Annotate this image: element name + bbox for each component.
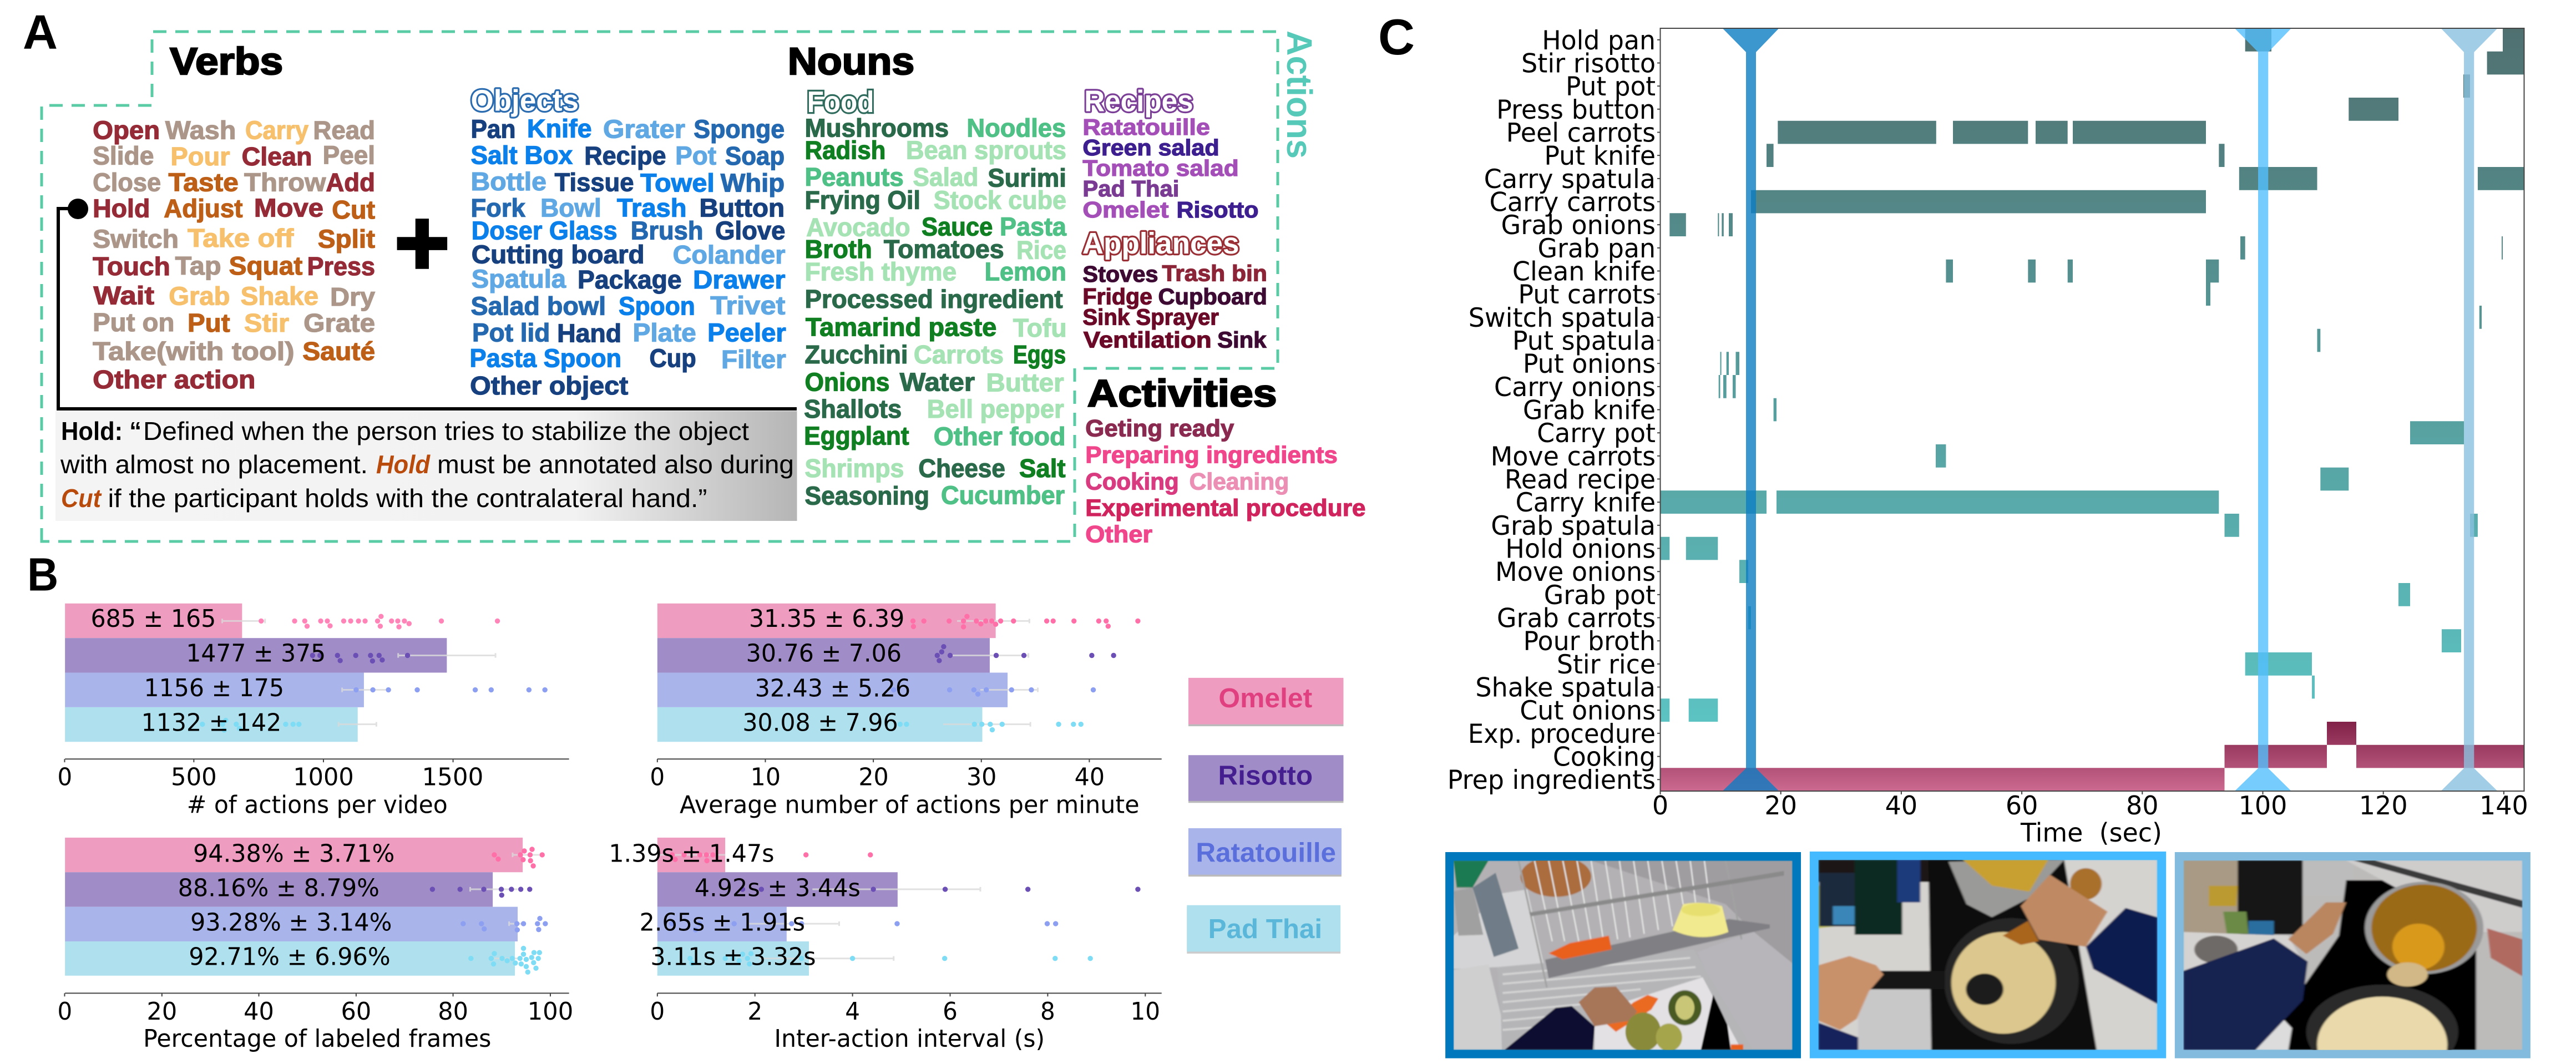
timeline y-axis labels: Grab knife	[1523, 395, 1656, 425]
object words: Hand	[557, 319, 621, 348]
food words: Shallots	[804, 395, 902, 423]
chart: percentage of labeled frames: Percentage of labeled frames	[143, 1025, 491, 1053]
object words: Plate	[633, 318, 696, 347]
object words: Pasta Spoon	[470, 343, 621, 372]
chart: percentage of labeled frames: 94.38% ± 3.71%	[193, 839, 394, 868]
time axis labels	[1652, 791, 2528, 820]
activity words	[1085, 415, 1365, 548]
legend: pad thai: Pad Thai	[1208, 914, 1322, 944]
recipe words: Pad Thai	[1082, 176, 1179, 202]
food words: Radish	[805, 136, 885, 165]
actions vertical label: Actions	[1279, 31, 1319, 159]
appliance words: Fridge	[1082, 285, 1152, 310]
activity words: Geting ready	[1085, 415, 1234, 442]
chart: actions per video: 1000	[293, 763, 354, 792]
food words: Tomatoes	[884, 235, 1004, 264]
time axis labels: 0	[1652, 791, 1668, 820]
timeline y-axis labels: Press button	[1496, 94, 1656, 125]
left charts column	[27, 548, 573, 1053]
timeline y-axis labels: Prep ingredients	[1448, 764, 1656, 796]
timeline y-axis labels: Cooking	[1553, 742, 1656, 772]
timeline y-axis labels: Grab spatula	[1491, 510, 1656, 541]
timeline y-axis labels: Move carrots	[1491, 441, 1656, 472]
chart: percentage of labeled frames: 40	[244, 997, 274, 1026]
food words: Eggplant	[804, 422, 909, 450]
activity words: Cooking	[1085, 468, 1179, 495]
recipe words: Omelet	[1082, 197, 1168, 222]
chart: percentage of labeled frames: 92.71% ± 6.96%	[189, 943, 391, 971]
object words: Recipe	[584, 141, 666, 170]
food words: Carrots	[914, 341, 1004, 369]
hold definition text: Defined when the person tries to stabilize the object	[143, 417, 749, 445]
chart: actions per minute: Average number of actions per minute	[680, 791, 1140, 819]
timeline y-axis labels: Clean knife	[1512, 256, 1656, 287]
chart: actions per minute: 10	[751, 763, 781, 792]
object words: Spoon	[619, 292, 695, 321]
appliance words: Sink	[1217, 327, 1267, 353]
timeline y-axis labels: Put spatula	[1512, 326, 1656, 356]
verb words: Touch	[93, 252, 170, 281]
chart: percentage of labeled frames: 100	[528, 997, 573, 1026]
object words: Grater	[603, 115, 685, 144]
chart: actions per minute	[650, 604, 1162, 819]
food words: Tofu	[1013, 314, 1067, 342]
timeline y-axis labels: Carry carrots	[1490, 187, 1656, 217]
appliance words: Ventilation	[1084, 327, 1212, 353]
verb words: Squat	[229, 251, 302, 280]
chart: inter-action interval: 2	[747, 997, 762, 1026]
timeline y-axis labels	[1448, 25, 1656, 796]
chart: percentage of labeled frames: 80	[438, 997, 468, 1026]
timeline y-axis labels: Grab onions	[1501, 210, 1656, 241]
time axis labels: 40	[1885, 791, 1917, 820]
chart: inter-action interval	[609, 838, 1162, 1053]
food words: Stock cube	[934, 186, 1066, 215]
object words: Bottle	[470, 167, 546, 196]
objects section	[470, 40, 914, 400]
timeline y-axis labels: Put pot	[1566, 71, 1656, 102]
timeline frame and ticks	[1657, 28, 2524, 794]
verb words: Sauté	[302, 337, 375, 366]
chart: actions per minute: 30.76 ± 7.06	[746, 639, 902, 667]
timeline y-axis labels: Stir risotto	[1521, 48, 1656, 79]
hold definition text: must be annotated also during	[437, 450, 794, 479]
timeline y-axis labels: Carry onions	[1494, 372, 1656, 402]
chart: actions per minute: 30	[966, 763, 996, 792]
chart: inter-action interval: 0	[650, 997, 665, 1026]
verb words: Take(with tool)	[93, 337, 295, 366]
time marker at 100 sec	[2235, 28, 2291, 791]
legend: omelet: Omelet	[1218, 683, 1312, 713]
timeline y-axis labels: Grab pan	[1537, 233, 1656, 264]
food words: Tamarind paste	[806, 313, 996, 342]
chart: percentage of labeled frames: 88.16% ± 8.79%	[178, 874, 379, 902]
legend: ratatouille: Ratatouille	[1196, 838, 1336, 868]
food words: Frying Oil	[805, 186, 920, 215]
food words: Eggs	[1013, 341, 1066, 369]
nouns heading: Nouns	[788, 40, 914, 83]
time axis title: Time (sec)	[2020, 818, 2162, 848]
chart: actions per video: 1156 ± 175	[144, 674, 284, 702]
food words: Noodles	[966, 114, 1066, 143]
object words: Cutting board	[472, 240, 645, 268]
chart: actions per minute: 31.35 ± 6.39	[749, 605, 904, 633]
object words: Button	[699, 193, 785, 222]
hold definition box	[55, 411, 797, 521]
chart: actions per video: 0	[57, 763, 72, 792]
verb words: Carry	[245, 116, 309, 145]
object words: Sponge	[694, 115, 785, 144]
verb words: Cut	[332, 195, 375, 224]
object words: Trivet	[710, 291, 785, 320]
verbs heading: Verbs	[170, 40, 283, 83]
chart: actions per minute: 40	[1075, 763, 1105, 792]
panel letter B: B	[27, 548, 58, 601]
verb words: Wash	[165, 116, 236, 145]
time axis labels: 100	[2239, 791, 2287, 820]
object words: Knife	[527, 114, 592, 143]
dashed actions border	[42, 32, 1278, 541]
verb words: Adjust	[164, 194, 243, 223]
panel A: action vocabulary	[23, 6, 1365, 548]
chart: actions per video: 500	[171, 763, 217, 792]
object words: Soap	[725, 141, 785, 170]
verb words: Throw	[244, 168, 326, 196]
chart: percentage of labeled frames: 0	[57, 997, 72, 1026]
recipe words	[1082, 115, 1258, 222]
food words: Butter	[986, 369, 1064, 397]
timeline y-axis labels: Switch spatula	[1469, 302, 1656, 333]
object words: Package	[578, 265, 682, 294]
verb words: Put	[188, 308, 230, 337]
food words: Seasoning	[805, 482, 929, 510]
chart: actions per minute: 20	[858, 763, 889, 792]
time axis labels: 80	[2126, 791, 2159, 820]
timeline y-axis labels: Put carrots	[1518, 279, 1656, 310]
object words: Cup	[650, 343, 696, 372]
object words: Whip	[721, 169, 785, 197]
food words: Mushrooms	[805, 114, 949, 143]
chart: percentage of labeled frames: 20	[146, 997, 177, 1026]
timeline y-axis labels: Grab carrots	[1497, 603, 1656, 634]
verb words: Dry	[330, 282, 376, 311]
food words: Onions	[805, 368, 889, 397]
verb words: Grab	[169, 282, 230, 311]
food words	[804, 114, 1067, 510]
chart: actions per minute: 32.43 ± 5.26	[755, 674, 910, 702]
timeline y-axis labels: Move onions	[1495, 556, 1656, 587]
food words: Processed ingredient	[805, 285, 1063, 314]
hold definition text: Hold	[376, 450, 431, 479]
chart: inter-action interval: 1.39s ± 1.47s	[609, 839, 775, 868]
frame 2: stirring rice	[1810, 852, 2166, 1058]
object words: Doser Glass	[472, 216, 618, 245]
object words: Pan	[470, 115, 515, 144]
verb words: Take off	[188, 224, 294, 252]
food words: Salt	[1019, 454, 1066, 483]
recipe words: Tomato salad	[1082, 156, 1239, 181]
appliance words	[1082, 261, 1267, 353]
verb words: Stir	[244, 308, 289, 337]
verb words: Other action	[93, 365, 255, 394]
chart: actions per video: 1477 ± 375	[186, 640, 326, 667]
verb words: Shake	[241, 282, 318, 311]
chart: inter-action interval: Inter-action interval (s)	[775, 1025, 1045, 1053]
verb words: Grate	[303, 308, 375, 337]
activity words: Other	[1085, 520, 1152, 548]
verb words: Press	[307, 252, 375, 281]
hold definition text: Hold: “	[61, 417, 141, 445]
activity words: Cleaning	[1190, 468, 1289, 495]
timeline y-axis labels: Peel carrots	[1506, 118, 1656, 148]
object words	[470, 114, 786, 400]
object words: Salt Box	[470, 140, 573, 169]
food words: Broth	[805, 235, 872, 264]
verb words: Add	[326, 168, 375, 196]
chart: actions per minute: 30.08 ± 7.96	[742, 708, 898, 737]
appliance words: Cupboard	[1158, 285, 1267, 310]
verb words: Wait	[93, 281, 154, 310]
panel B: annotation statistics	[27, 548, 1343, 1053]
timeline y-axis labels: Put onions	[1523, 348, 1656, 379]
chart: actions per video: 1132 ± 142	[141, 708, 281, 737]
food words: Surimi	[988, 164, 1066, 192]
legend: pad thai	[1187, 905, 1340, 954]
timeline y-axis labels: Carry knife	[1516, 487, 1656, 518]
panel C: timeline and video frames	[1378, 9, 2531, 1064]
verb words: Move	[254, 193, 323, 222]
food words: Other food	[934, 423, 1066, 451]
chart: actions per video: # of actions per video	[187, 791, 448, 819]
activity timeline bars	[1660, 722, 2524, 791]
time axis labels: 140	[2479, 791, 2528, 820]
verb words	[93, 116, 376, 394]
chart: actions per video: 1500	[422, 763, 483, 792]
verb words: Hold	[93, 194, 150, 223]
time axis labels: 120	[2359, 791, 2408, 820]
plus sign	[397, 219, 447, 269]
activities heading: Activities	[1087, 372, 1277, 415]
timeline y-axis labels: Carry spatula	[1484, 164, 1656, 194]
chart: percentage of labeled frames: 60	[341, 997, 371, 1026]
verb words: Slide	[93, 141, 154, 170]
timeline y-axis labels: Read recipe	[1505, 464, 1656, 495]
appliance words: Trash bin	[1162, 261, 1267, 286]
activity words: Preparing ingredients	[1085, 441, 1338, 468]
food words: Pasta	[1000, 212, 1067, 241]
food words: Sauce	[922, 212, 993, 241]
object words: Pot lid	[472, 318, 550, 347]
appliance words: Sink Sprayer	[1082, 305, 1219, 330]
food words: Water	[900, 368, 975, 397]
hold connector line	[58, 199, 797, 409]
food words: Zucchini	[805, 341, 908, 369]
object words: Drawer	[693, 265, 786, 294]
recipe words: Risotto	[1176, 197, 1258, 222]
chart: actions per video	[57, 604, 569, 819]
timeline y-axis labels: Exp. procedure	[1468, 718, 1656, 749]
timeline y-axis labels: Stir rice	[1557, 649, 1656, 680]
verb words: Switch	[93, 224, 179, 253]
legend: omelet	[1188, 678, 1343, 726]
chart: inter-action interval: 4.92s ± 3.44s	[695, 874, 861, 902]
object words: Other object	[470, 371, 628, 400]
food words: Fresh thyme	[805, 257, 956, 286]
food words: Rice	[1016, 236, 1066, 265]
food words: Bean sprouts	[906, 136, 1066, 165]
verb words: Peel	[323, 140, 375, 169]
food words: Cheese	[918, 454, 1005, 483]
food words: Salad	[913, 163, 978, 192]
time axis labels: 20	[1764, 791, 1797, 820]
recipe words: Ratatouille	[1082, 115, 1210, 140]
chart: inter-action interval: 8	[1040, 997, 1055, 1026]
object words: Filter	[721, 344, 786, 373]
time axis labels: 60	[2006, 791, 2038, 820]
object words: Bowl	[540, 193, 601, 222]
object words: Spatula	[472, 264, 566, 293]
chart: inter-action interval: 6	[943, 997, 958, 1026]
food words: Bell pepper	[927, 395, 1064, 423]
recipe words: Green salad	[1082, 135, 1219, 161]
timeline y-axis labels: Shake spatula	[1475, 672, 1656, 703]
object words: Glove	[715, 216, 785, 245]
object words: Pot	[675, 141, 716, 170]
food, recipes, appliances, activities section	[804, 84, 1365, 548]
food words: Cucumber	[941, 482, 1065, 510]
legend: ratatouille	[1188, 828, 1342, 876]
verbs section	[93, 40, 447, 394]
timeline y-axis labels: Put knife	[1544, 140, 1656, 171]
food words: Peanuts	[805, 163, 904, 192]
object words: Towel	[640, 169, 715, 197]
verb words: Pour	[170, 142, 230, 171]
object words: Salad bowl	[470, 292, 606, 321]
hold definition text: Cut	[61, 484, 102, 513]
object words: Trash	[617, 193, 687, 222]
legend: risotto	[1188, 755, 1343, 803]
verb words: Taste	[169, 168, 239, 196]
hold definition text: with almost no placement.	[60, 450, 368, 479]
hold definition text	[60, 417, 794, 513]
verb words: Read	[313, 116, 375, 145]
verb words: Split	[318, 224, 375, 253]
action timeline bars	[1660, 28, 2524, 722]
chart: inter-action interval: 4	[845, 997, 860, 1026]
objects heading: Objects	[470, 85, 579, 118]
timeline y-axis labels: Grab pot	[1544, 580, 1656, 610]
timeline y-axis labels: Cut onions	[1520, 695, 1656, 726]
time marker at 134 sec	[2441, 28, 2498, 791]
appliances heading: Appliances	[1082, 226, 1239, 260]
verb words: Tap	[175, 251, 221, 280]
verb words: Put on	[93, 308, 174, 337]
chart: actions per video: 685 ± 165	[90, 605, 216, 633]
food heading: Food	[807, 85, 874, 118]
object words: Brush	[631, 216, 703, 245]
verb words: Clean	[242, 142, 312, 171]
verb words: Open	[93, 116, 160, 145]
verb words: Close	[93, 168, 161, 196]
chart: percentage of labeled frames	[57, 838, 573, 1053]
timeline y-axis labels: Carry pot	[1537, 418, 1656, 449]
chart: percentage of labeled frames: 93.28% ± 3.14%	[190, 909, 392, 936]
timeline y-axis labels: Hold onions	[1505, 534, 1656, 564]
timeline y-axis labels: Pour broth	[1524, 626, 1656, 657]
panel letter C: C	[1378, 9, 1415, 65]
chart: inter-action interval: 10	[1131, 997, 1160, 1026]
food words: Avocado	[806, 214, 910, 242]
appliance words: Stoves	[1082, 262, 1158, 287]
time marker at 15 sec	[1723, 28, 1779, 791]
recipes heading: Recipes	[1084, 84, 1193, 118]
timeline y-axis labels: Hold pan	[1542, 25, 1656, 55]
hold definition text: if the participant holds with the contralateral hand.”	[108, 484, 707, 513]
chart: inter-action interval: 3.11s ± 3.32s	[650, 943, 816, 971]
chart: actions per minute: 0	[650, 763, 665, 792]
food words: Shrimps	[805, 454, 904, 483]
frame 3: pouring broth	[2175, 852, 2531, 1064]
legend: risotto: Risotto	[1218, 761, 1313, 791]
object words: Peeler	[707, 318, 786, 347]
food words: Lemon	[985, 257, 1066, 286]
activity words: Experimental procedure	[1085, 494, 1365, 521]
chart: inter-action interval: 2.65s ± 1.91s	[640, 908, 805, 936]
panel letter A: A	[23, 6, 58, 59]
object words: Fork	[470, 193, 525, 222]
object words: Colander	[673, 240, 786, 269]
frame 1: cutting vegetables	[1445, 852, 1801, 1058]
right charts column and legend	[609, 604, 1343, 1053]
object words: Tissue	[555, 168, 634, 196]
